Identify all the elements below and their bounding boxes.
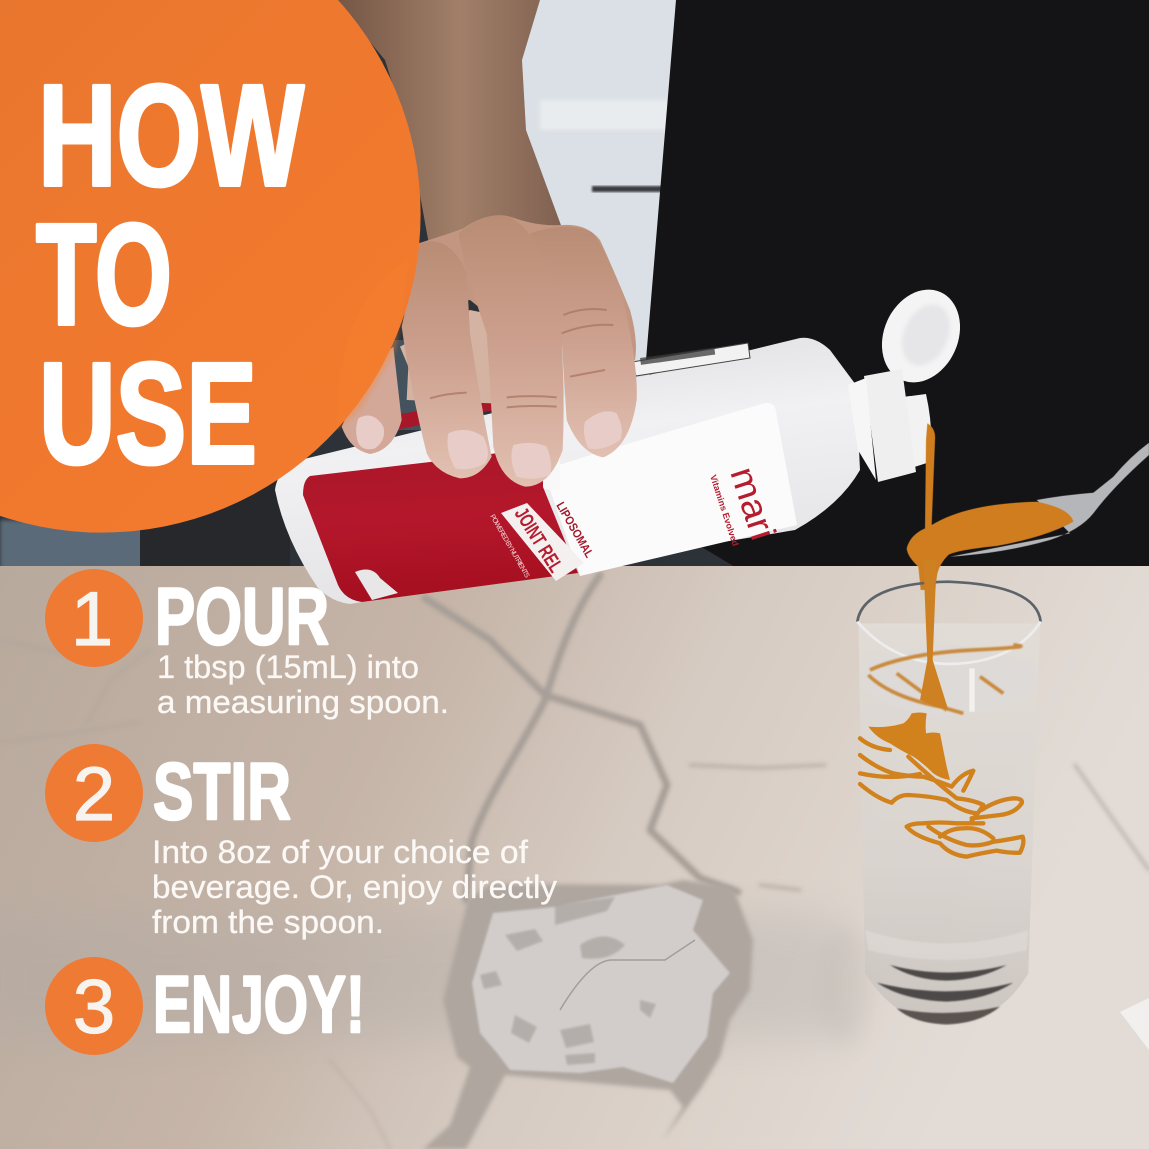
soft glass shadow (819, 925, 871, 1045)
bottle product text: JOINT REL (510, 504, 567, 577)
back of hand (407, 216, 636, 360)
step 1 number badge (45, 569, 143, 667)
bottle (275, 277, 974, 604)
glass of water (857, 560, 1041, 1025)
step 2 description: beverage. Or, enjoy directly (152, 869, 557, 905)
bottle body (275, 338, 860, 604)
step 3 heading: ENJOY! (153, 960, 365, 1050)
bottle product text: POWERED BY NUTRIENTS (488, 514, 530, 580)
cool grey band in the marble (0, 915, 840, 1040)
bottle product text: LIPOSOMAL (553, 500, 597, 560)
bottle product text (488, 462, 784, 580)
palm behind fingers (400, 310, 493, 403)
step 1 description (157, 649, 449, 720)
step 3: enjoy (45, 957, 365, 1055)
forearm (335, 0, 562, 250)
spout (895, 394, 931, 470)
marble inclusion (472, 885, 730, 1083)
liquid stream and spoon pool (907, 423, 1073, 590)
glass base (877, 965, 1013, 1024)
hand shadow through circle (337, 258, 410, 430)
glass body (858, 623, 1040, 1025)
spoon with liquid (907, 423, 1149, 590)
background: kitchen and shirt (0, 0, 1149, 575)
inclusion spots (480, 897, 656, 1065)
white panel (543, 403, 797, 576)
step 1 number badge: 1 (71, 577, 113, 662)
orange title circle (0, 0, 421, 533)
title: how to use: TO (36, 194, 172, 355)
bottle product text: mari (722, 462, 784, 545)
step 2 description (152, 834, 557, 940)
step 3 number badge (45, 957, 143, 1055)
step 3 number badge: 3 (73, 965, 115, 1050)
black shirt (646, 0, 1149, 570)
white product name box (501, 503, 584, 581)
hand (342, 215, 637, 487)
step 1 description: 1 tbsp (15mL) into (157, 649, 419, 685)
thin red stripe above fingers (395, 398, 495, 430)
pinky finger (342, 347, 402, 454)
liquid column (920, 560, 948, 710)
orange swirl at surface (868, 645, 1021, 713)
title: how to use: USE (39, 333, 257, 494)
step 2 heading: STIR (153, 747, 291, 837)
step 2 number badge: 2 (73, 752, 115, 837)
bottle product text: Vitamins Evolved (708, 474, 741, 547)
title: how to use (36, 55, 304, 494)
spoon chrome (950, 443, 1149, 557)
index finger (530, 227, 637, 457)
collar (864, 369, 916, 482)
title: how to use: HOW (38, 55, 304, 216)
marble vein ring (423, 880, 753, 1149)
marble counter (0, 566, 1149, 1149)
white pill on label (355, 570, 398, 600)
finger nails (356, 411, 622, 479)
step 2 description: Into 8oz of your choice of (152, 834, 528, 870)
step 2: stir (45, 744, 557, 940)
step 2 number badge (45, 744, 143, 842)
barcode (632, 343, 750, 376)
step 1 description: a measuring spoon. (157, 684, 449, 720)
ring finger (402, 241, 492, 478)
neck (848, 378, 876, 480)
marble veins (0, 575, 1149, 1149)
red label (303, 447, 578, 602)
orange swirls (860, 712, 1023, 857)
white plate corner (1120, 998, 1149, 1050)
water highlight (969, 668, 975, 712)
glass rim (857, 582, 1041, 664)
cap lid (868, 277, 974, 395)
step 2 description: from the spoon. (152, 904, 384, 940)
water surface (860, 645, 1037, 715)
step 1 heading: POUR (155, 572, 329, 662)
white band behind fingers (325, 440, 560, 490)
finger creases (430, 309, 613, 407)
step 1: pour (45, 569, 449, 720)
glass highlights (865, 930, 1028, 960)
middle finger (458, 215, 564, 487)
